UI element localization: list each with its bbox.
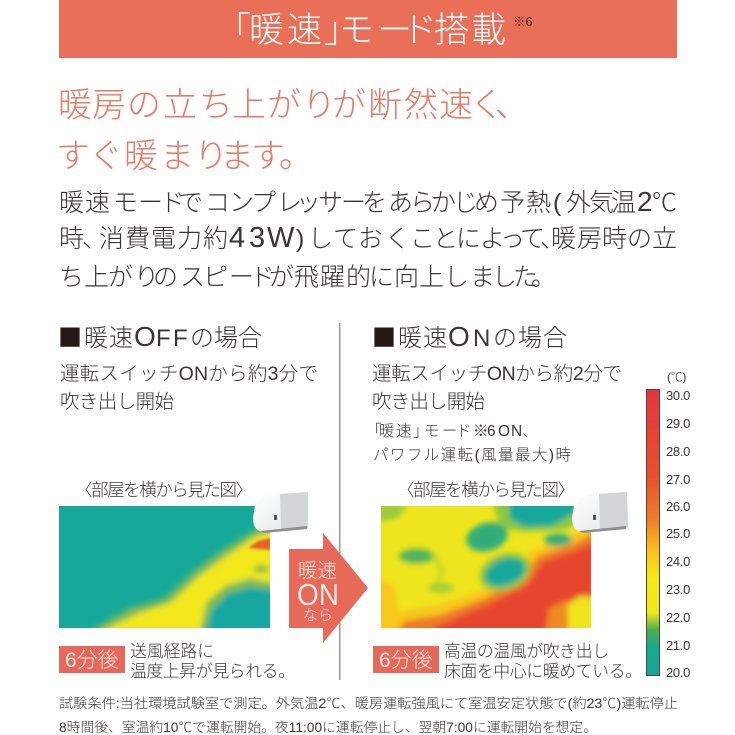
scale labels bbox=[666, 370, 690, 680]
scale bar bbox=[646, 390, 660, 676]
condition note bbox=[366, 422, 571, 464]
scale labels: 26.0 bbox=[666, 499, 690, 514]
icon: air conditioner left bbox=[253, 492, 308, 533]
room caption: off: 〈部屋を横から見た図〉 bbox=[75, 480, 253, 500]
scale labels: 29.0 bbox=[666, 416, 690, 431]
body text: )しておくことによって、暖房時の立 bbox=[296, 225, 677, 253]
scale labels: 27.0 bbox=[666, 472, 690, 487]
description: on bbox=[372, 363, 622, 413]
scale labels: 30.0 bbox=[666, 388, 690, 403]
description: on: 吹き出し開始 bbox=[372, 391, 485, 413]
arrow: boost on: 暖速 bbox=[298, 560, 337, 582]
arrow: boost on bbox=[289, 533, 368, 643]
description: off: 運転スイッチONから約3分で bbox=[60, 363, 318, 385]
result text: off bbox=[130, 642, 295, 681]
heading: on: Nの場合 bbox=[473, 325, 567, 352]
scale labels: 22.0 bbox=[666, 610, 690, 625]
footnote: 試験条件:当社環境試験室で測定。外気温2℃、暖房運転強風にて室温安定状態で(約23℃)運転停止 bbox=[59, 696, 678, 711]
heading: on: 暖速 bbox=[398, 325, 447, 352]
description: off: 吹き出し開始 bbox=[60, 391, 174, 413]
scale labels: 25.0 bbox=[666, 526, 690, 541]
body text bbox=[59, 186, 677, 292]
heading: すぐ暖まります。 bbox=[56, 128, 313, 178]
result text: on bbox=[444, 642, 642, 681]
room caption: on: 〈部屋を横から見た図〉 bbox=[397, 480, 575, 500]
arrow: boost on: ON bbox=[297, 577, 339, 612]
body text: 2 bbox=[637, 186, 653, 217]
time badge: off bbox=[59, 646, 125, 673]
result text: on: 床面を中心に暖めている。 bbox=[444, 662, 642, 681]
scale labels: 20.0 bbox=[666, 665, 690, 680]
footnote: 8時間後、室温約10℃で運転開始。夜11:00に運転停止し、翌朝7:00に運転開始を想定。 bbox=[59, 720, 597, 735]
condition note: 「暖速」モード※6ON、 bbox=[366, 422, 538, 440]
footnote bbox=[59, 696, 678, 735]
heading: on bbox=[372, 318, 567, 353]
colour scale legend bbox=[646, 370, 690, 680]
scale labels: 28.0 bbox=[666, 444, 690, 459]
time badge: off: 6分後 bbox=[65, 649, 119, 672]
body text: 時、消費電力約 bbox=[59, 225, 228, 253]
condition note: パワフル運転(風量最大)時 bbox=[373, 446, 571, 464]
title banner bbox=[59, 0, 677, 58]
time badge: on bbox=[373, 646, 439, 673]
arrow: boost on: なら bbox=[303, 607, 333, 624]
scale labels: 24.0 bbox=[666, 554, 690, 569]
body text: 43W bbox=[229, 222, 295, 254]
heading bbox=[56, 78, 529, 178]
heading: off: O bbox=[134, 321, 156, 352]
divider bbox=[339, 323, 340, 680]
time badge: on: 6分後 bbox=[379, 649, 433, 672]
body text: ち上がりのスピードが飛躍的に向上しました。 bbox=[59, 264, 556, 292]
heading: off: ■ bbox=[58, 318, 82, 353]
body text: 暖速モードでコンプレッサーをあらかじめ予熱(外気温 bbox=[59, 189, 636, 217]
heading: 暖房の立ち上がりが断然速く、 bbox=[58, 78, 529, 126]
title banner: ※6 bbox=[513, 15, 533, 29]
scale labels: 23.0 bbox=[666, 582, 690, 597]
heat map: on bbox=[381, 506, 591, 628]
heading: on: ■ bbox=[372, 318, 396, 353]
description: on: 運転スイッチONから約2分で bbox=[372, 363, 622, 385]
heat map: off bbox=[59, 506, 275, 632]
heading: on: O bbox=[448, 321, 470, 352]
scale labels: 21.0 bbox=[666, 638, 690, 653]
result text: off: 送風経路に bbox=[130, 642, 214, 661]
heading: off: FFの場合 bbox=[156, 325, 262, 352]
icon: air conditioner right bbox=[572, 492, 628, 533]
scale labels: (℃) bbox=[667, 370, 686, 384]
heading: off bbox=[58, 318, 262, 353]
heading: off: 暖速 bbox=[84, 325, 133, 352]
panel: heating boost on bbox=[366, 318, 642, 681]
panel: heating boost off bbox=[58, 318, 318, 681]
title banner: 「暖速」モード搭載 bbox=[216, 2, 506, 53]
result text: on: 高温の温風が吹き出し bbox=[444, 642, 609, 661]
description: off bbox=[60, 363, 318, 413]
result text: off: 温度上昇が見られる。 bbox=[130, 662, 295, 681]
body text: ℃ bbox=[652, 189, 677, 217]
